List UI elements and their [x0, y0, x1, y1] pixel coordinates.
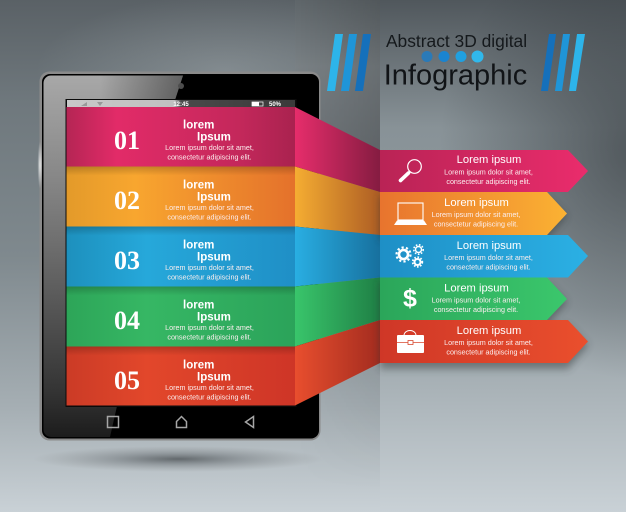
panel: band 03: Lorem ipsum dolor sit amet, [165, 263, 254, 272]
arrow shadows [380, 196, 588, 369]
panel: band 01 [66, 107, 296, 166]
panel: band 05: consectetur adipiscing elit. [167, 392, 252, 402]
panel: band 02: lorem [183, 180, 214, 192]
folds connecting bands to arrows [295, 107, 380, 406]
title: Infographic [384, 60, 527, 92]
arrow 4 [380, 278, 567, 320]
dots [422, 50, 484, 62]
arrow 1: consectetur adipiscing elit. [446, 177, 531, 186]
icon: magnifier [400, 160, 421, 180]
left stripes [327, 34, 371, 91]
status bar: 12:45 [173, 102, 189, 108]
arrow 4: Lorem ipsum dolor sit amet, [432, 296, 520, 304]
panel: band 02: 02 [114, 186, 140, 215]
nav buttons [108, 416, 254, 428]
panel: band 05: Lorem ipsum dolor sit amet, [165, 383, 254, 392]
title [327, 31, 585, 92]
panel: band 02 [66, 166, 296, 226]
panel: band 04: consectetur adipiscing elit. [167, 332, 252, 342]
icon: gears [396, 245, 423, 267]
tablet shadow [33, 446, 323, 472]
panel: band 05 [66, 346, 296, 406]
arrow 5: consectetur adipiscing elit. [446, 348, 531, 356]
right stripes [541, 34, 585, 91]
panel: band 01: lorem [183, 120, 214, 132]
arrow 5: Lorem ipsum dolor sit amet, [444, 338, 533, 347]
icon: briefcase [397, 330, 424, 353]
bezel top darkening [100, 76, 183, 100]
highlight on tablet edge [38, 141, 42, 189]
status bar [67, 100, 295, 108]
status bar: 50% [269, 102, 282, 108]
title: Abstract 3D digital [386, 31, 527, 51]
panel: band 02: consectetur adipiscing elit. [167, 212, 252, 222]
arrow 3: Lorem ipsum dolor sit amet, [444, 253, 533, 262]
arrow 5 [380, 320, 588, 363]
screen [66, 99, 296, 407]
panel: band 04: Ipsum [197, 312, 231, 324]
arrow 1: Lorem ipsum [457, 154, 521, 166]
panel: band 01: 01 [114, 126, 140, 155]
arrow 3: consectetur adipiscing elit. [446, 262, 531, 272]
panel: band 04: lorem [183, 300, 214, 312]
panel: band 03: lorem [183, 240, 214, 252]
arrow 2 [380, 192, 567, 235]
panel: band 01: consectetur adipiscing elit. [167, 152, 252, 162]
panel: band 04: Lorem ipsum dolor sit amet, [165, 323, 254, 332]
panel: band 03: consectetur adipiscing elit. [167, 272, 252, 282]
panel: band 01: Lorem ipsum dolor sit amet, [165, 143, 254, 152]
arrow 4: consectetur adipiscing elit. [434, 305, 518, 314]
panel: band 03: Ipsum [197, 252, 231, 264]
panel: band 05: 05 [114, 366, 140, 395]
arrow 1 [380, 150, 588, 192]
panel: band 05: Ipsum [197, 372, 231, 384]
arrow 3 [380, 235, 588, 278]
panel: band 02: Ipsum [197, 192, 231, 204]
panel: band 03: 03 [114, 246, 140, 275]
camera [178, 83, 184, 89]
arrow 4: Lorem ipsum [444, 282, 509, 294]
arrow 3: Lorem ipsum [457, 240, 521, 252]
bezel gloss [44, 76, 183, 437]
arrow 5: Lorem ipsum [457, 325, 521, 337]
panel: band 04: 04 [114, 306, 140, 335]
panel: band 02: Lorem ipsum dolor sit amet, [165, 203, 254, 212]
icon: dollar: $ [403, 284, 417, 312]
icon: laptop [394, 203, 427, 225]
panel: band 04 [66, 286, 296, 346]
arrow 2: Lorem ipsum [444, 197, 509, 209]
panel: band 01: Ipsum [197, 132, 231, 144]
panel: band 05: lorem [183, 360, 214, 372]
panel: band 03 [66, 226, 296, 286]
arrow 2: Lorem ipsum dolor sit amet, [432, 210, 520, 219]
arrow 2: consectetur adipiscing elit. [434, 220, 518, 228]
tablet [40, 72, 320, 440]
arrow 1: Lorem ipsum dolor sit amet, [444, 168, 533, 176]
